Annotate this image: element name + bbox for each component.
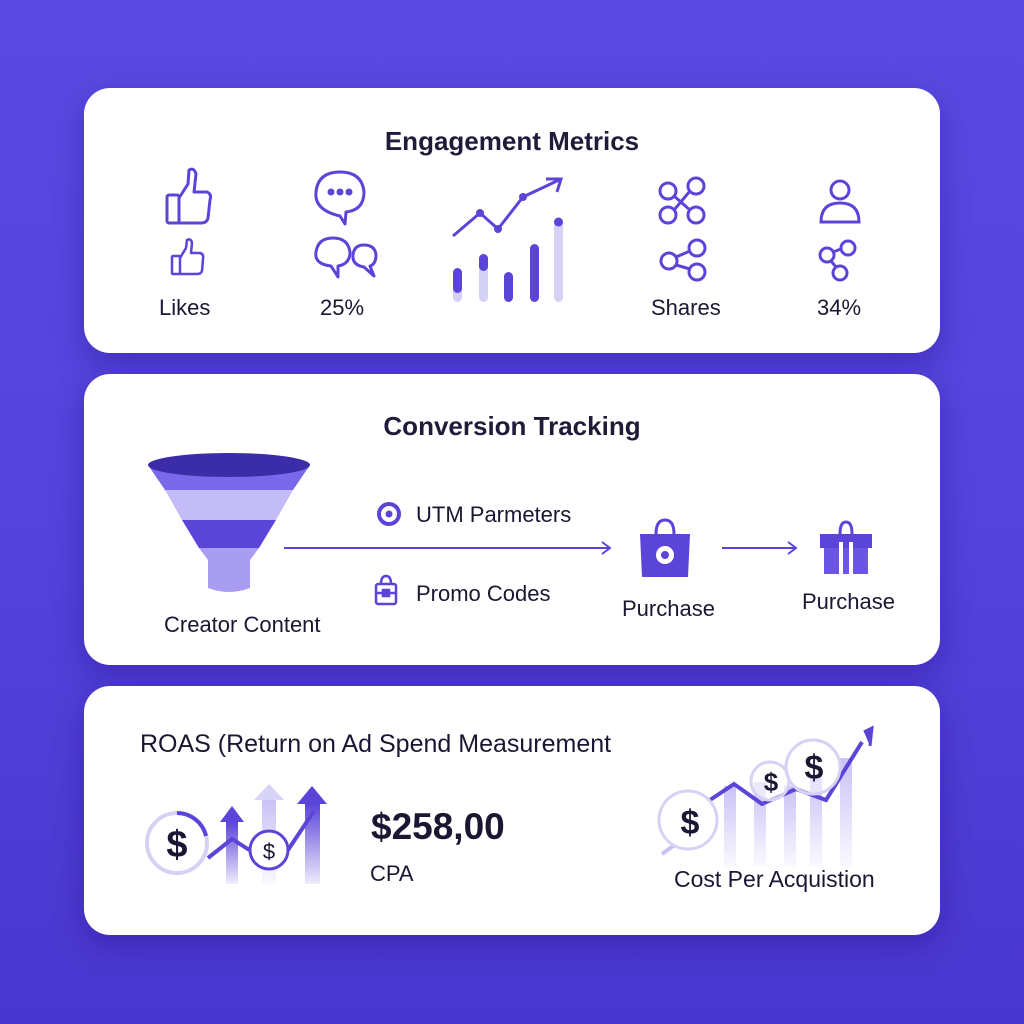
chart: cost per acquisition trend: $ <box>764 767 779 797</box>
panel: ROAS <box>84 686 940 935</box>
chart: cost per acquisition trend <box>658 725 874 863</box>
icon: purchase bag <box>640 518 690 577</box>
icon: promo bag <box>374 574 398 606</box>
chart: line and bars <box>452 178 563 302</box>
icon: funnel <box>148 453 798 592</box>
label: promo codes: Promo Codes <box>416 581 551 606</box>
chart: cost per acquisition trend: $ <box>805 749 824 787</box>
chart: ROAS arrows with coins: $ <box>263 839 275 864</box>
label: cost per acquisition: Cost Per Acquistion <box>674 866 875 892</box>
icon: thumbs up <box>166 168 212 224</box>
heading: conversion tracking: Conversion Tracking <box>383 411 641 441</box>
icon: user and share <box>818 180 860 282</box>
chart: cost per acquisition trend: $ <box>681 804 700 842</box>
label: creator content: Creator Content <box>164 612 321 637</box>
icon: speech bubbles <box>314 170 378 278</box>
label: UTM parameters: UTM Parmeters <box>416 502 571 527</box>
chart: ROAS arrows with coins <box>145 784 327 884</box>
label: 25%: 25% <box>320 295 364 320</box>
label: likes: Likes <box>159 295 210 320</box>
icon: share network <box>658 176 706 282</box>
label: 34%: 34% <box>817 295 861 320</box>
label: purchase: Purchase <box>622 596 715 621</box>
label: shares: Shares <box>651 295 721 320</box>
icon: gift <box>820 520 872 574</box>
label: CPA: CPA <box>370 861 414 886</box>
icon: small thumbs up <box>170 238 204 276</box>
label: purchase 2: Purchase <box>802 589 895 614</box>
heading: engagement metrics: Engagement Metrics <box>385 126 639 156</box>
panel: conversion tracking <box>84 374 940 665</box>
chart: ROAS arrows with coins: $ <box>166 824 188 866</box>
heading: ROAS: ROAS (Return on Ad Spend Measurement <box>140 730 611 758</box>
icon: UTM target <box>377 502 401 526</box>
panel: engagement metrics <box>84 88 940 353</box>
value: $258,00: $258,00 <box>371 806 505 847</box>
